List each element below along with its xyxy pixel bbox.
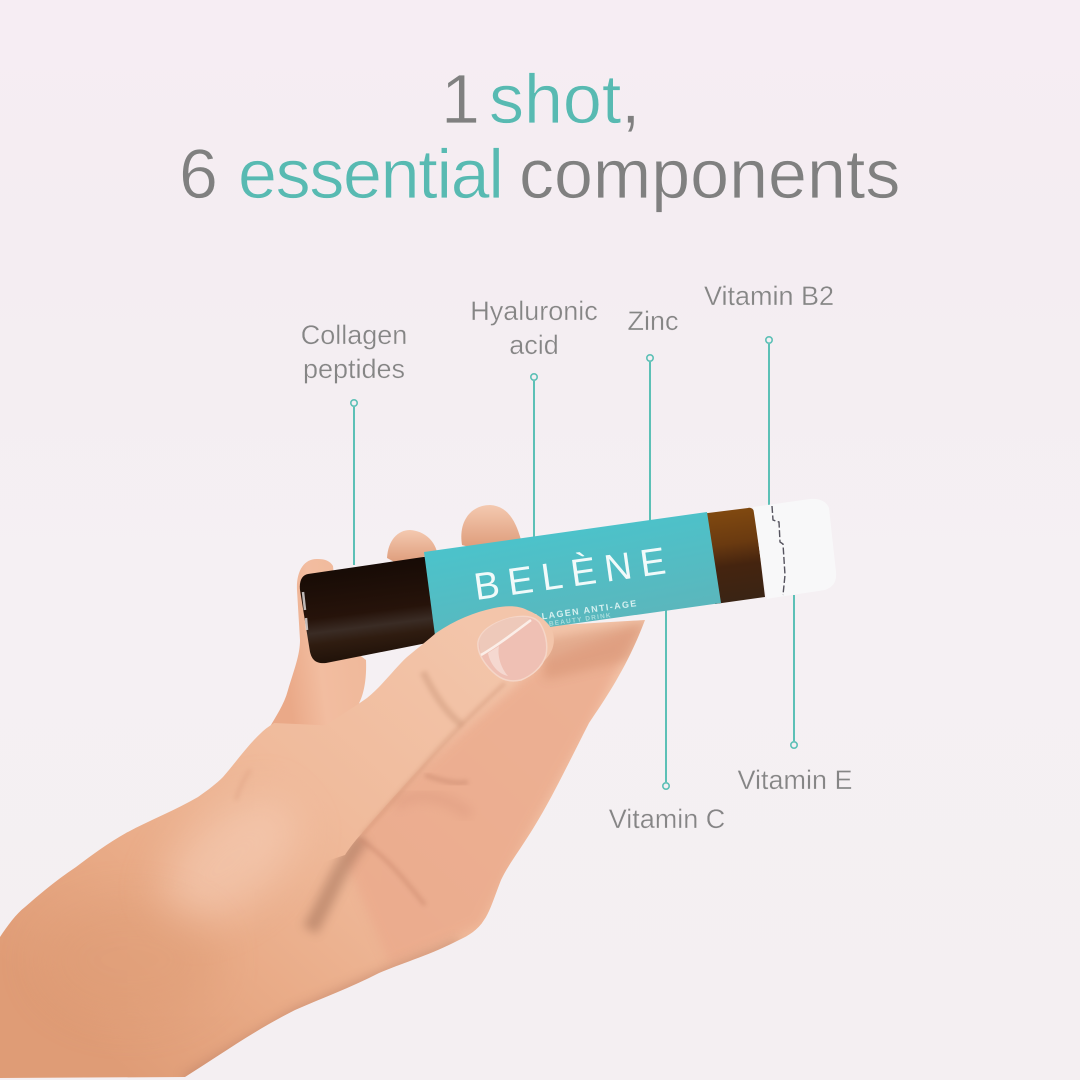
vial: dark glass bottom xyxy=(300,556,442,663)
title: shot xyxy=(489,60,621,138)
title: essential xyxy=(238,135,503,213)
title: , xyxy=(621,60,640,138)
title: 6 xyxy=(179,135,218,213)
vial xyxy=(300,499,836,663)
hand: palm and back of hand xyxy=(0,620,650,1080)
callout: Hyaluronic acid: Hyaluronic xyxy=(470,296,598,326)
label small text: COLLAGEN ANTI-AGE xyxy=(518,598,638,625)
palm pink tone xyxy=(345,625,640,965)
callout: Vitamin E: Vitamin E xyxy=(737,765,853,795)
callout: Vitamin E xyxy=(737,595,853,795)
callout: Vitamin C: Vitamin C xyxy=(609,804,725,834)
callout: Collagen peptides: Collagen xyxy=(301,320,407,350)
title: components xyxy=(519,135,900,213)
knuckle creases xyxy=(423,672,462,725)
thumb nail xyxy=(478,616,547,681)
callout: Vitamin C xyxy=(609,610,725,834)
vial: teal label xyxy=(424,512,721,643)
hand: thumb with nail xyxy=(255,606,554,870)
callout: Vitamin B2: Vitamin B2 xyxy=(704,281,834,311)
hand: soft highlights xyxy=(160,798,297,922)
vial: white cap xyxy=(753,499,836,599)
hand: fingers behind the vial xyxy=(268,505,521,740)
callout: Hyaluronic acid xyxy=(470,296,598,540)
vial: amber glass top xyxy=(700,508,765,604)
web crease xyxy=(310,838,362,930)
callout: Hyaluronic acid: acid xyxy=(509,330,559,360)
brand name: BELÈNE xyxy=(471,538,677,609)
title: 1 xyxy=(441,60,480,138)
callout: Collagen peptides xyxy=(301,320,407,565)
shadow beneath vial xyxy=(540,620,650,680)
lower edge shade xyxy=(185,944,459,1080)
callout: Zinc: Zinc xyxy=(627,306,679,336)
callout: Vitamin B2 xyxy=(704,281,834,510)
thumb lower edge shadow xyxy=(362,683,505,835)
callout: Collagen peptides: peptides xyxy=(303,354,405,384)
title xyxy=(179,60,900,213)
gap crease xyxy=(425,775,468,783)
vial: BEAUTY DRINK xyxy=(549,612,612,628)
callout: Zinc xyxy=(627,306,679,525)
